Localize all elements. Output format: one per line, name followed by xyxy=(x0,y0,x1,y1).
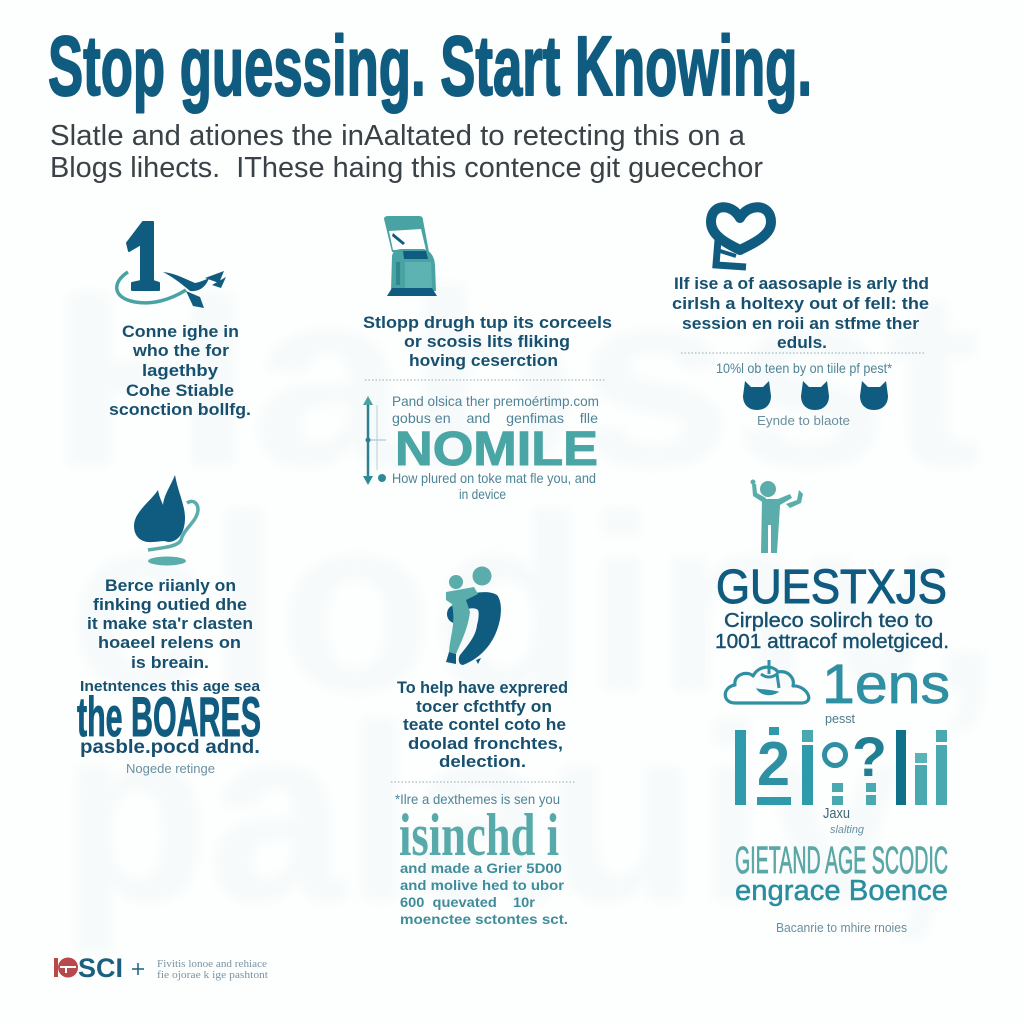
icon: two figures embracing xyxy=(446,566,501,665)
panel text: hoaeel relens on xyxy=(98,634,241,652)
logo wordmark: SCI xyxy=(78,953,123,983)
body text xyxy=(400,860,568,927)
panel: nomile tip xyxy=(363,216,612,502)
body text: moenctee sctontes sct. xyxy=(400,911,568,927)
panel: people tip xyxy=(391,566,575,927)
word line engrace Boence: engrace Boence xyxy=(735,875,948,907)
footer note: fie ojorae k ige pashtont xyxy=(157,970,268,981)
icon: number one with bird xyxy=(117,222,226,308)
panel text: who the for xyxy=(132,342,230,360)
panel text: lagethby xyxy=(142,362,219,380)
small footnote text: in device xyxy=(459,486,506,502)
small caption: Bacanrie to mhire rnoies xyxy=(776,920,907,935)
icon: person flexing xyxy=(750,480,803,553)
panel text: Berce riianly on xyxy=(105,577,236,595)
subtitle: Slatle and ationes the inAaltated to retecting this on a xyxy=(50,120,746,152)
subtitle: Blogs lihects. IThese haing this contence git guecechor xyxy=(50,152,763,184)
small labels: slalting xyxy=(830,824,865,836)
footer logo xyxy=(54,953,268,983)
panel text: delection. xyxy=(439,753,526,771)
panel text xyxy=(87,577,253,672)
panel text xyxy=(672,275,929,352)
background watermark lettering: clodinv, xyxy=(70,464,1000,743)
panel text: is breain. xyxy=(131,654,209,672)
small footnote text: How plured on toke mat fle you, and xyxy=(392,470,596,486)
plus sign xyxy=(132,963,144,975)
body text: and molive hed to ubor xyxy=(400,877,565,893)
icon: teal machine xyxy=(384,216,437,296)
icon: flame with teal handle xyxy=(134,475,198,566)
big words the BOARES: the BOARES xyxy=(77,685,261,748)
panel text xyxy=(109,323,251,419)
big word: isinchd i xyxy=(399,802,559,868)
footer note: Fivitis lonoe and rehiace xyxy=(157,959,268,970)
small footnote text xyxy=(392,470,596,502)
big word 1ens: 1ens xyxy=(822,652,950,715)
big word NOMILE: NOMILE xyxy=(395,423,598,476)
body text: 1001 attracof moletgiced. xyxy=(715,631,949,653)
panel heading text: Stlopp drugh tup its corceels xyxy=(363,314,612,332)
small caption: 10%l ob teen by on tiile pf pest* xyxy=(716,360,892,376)
small text: gobus en and genfimas flle xyxy=(392,410,598,426)
panel text: teate contel coto he xyxy=(403,716,566,734)
small caption: Eynde to blaote xyxy=(757,413,850,428)
panel text: cirlsh a holtexy out of fell: the xyxy=(672,295,929,313)
panel heading text xyxy=(363,314,612,370)
footer note xyxy=(157,959,268,981)
small caption: *Ilre a dexthemes is sen you xyxy=(395,791,560,807)
small text: Pand olsica ther premoértimp.com xyxy=(392,393,599,409)
panel text: finking outied dhe xyxy=(93,596,247,614)
panel: number one tip xyxy=(109,222,251,419)
icon: vertical double arrow scale xyxy=(363,396,386,485)
panel text: it make sta'r clasten xyxy=(87,615,253,633)
small labels: Jaxu xyxy=(823,805,850,822)
body text xyxy=(715,610,949,653)
panel text: session en roii an stfme ther xyxy=(682,315,920,333)
big word GUESTXJS: GUESTXJS xyxy=(716,561,947,614)
body text: Cirpleco solirch teo to xyxy=(724,610,933,632)
small caption: Nogede retinge xyxy=(126,761,215,776)
panel text: eduls. xyxy=(777,334,827,352)
icon: red circle mark xyxy=(54,958,78,978)
subtitle xyxy=(50,120,763,184)
panel heading text: hoving ceserction xyxy=(409,352,558,370)
chart: numeric bar row: 2 xyxy=(757,730,790,799)
chart: numeric bar row: ? xyxy=(852,725,887,788)
panel text: Ilf ise a of aasosaple is arly thd xyxy=(674,275,929,293)
panel text: To help have exprered xyxy=(397,679,568,697)
panel text: Conne ighe in xyxy=(122,323,239,341)
background watermark lettering: palauiv, xyxy=(60,674,950,953)
follow-up line: pasble.pocd adnd. xyxy=(80,737,260,758)
panel text xyxy=(397,679,568,771)
icons: three cat heads xyxy=(743,381,888,410)
small labels xyxy=(823,805,865,836)
chart: numeric bar row xyxy=(735,725,947,805)
panel: heart and cats xyxy=(672,207,929,428)
panel text: doolad fronchtes, xyxy=(408,735,563,753)
small label: pesst xyxy=(825,711,855,726)
background watermark lettering: Habsst xyxy=(50,239,980,518)
panel text: tocer cfcthtfy on xyxy=(416,698,552,716)
body text: and made a Grier 5D00 xyxy=(400,860,562,876)
icon: cloud xyxy=(725,660,809,703)
icon: heart speech bubble xyxy=(711,207,771,267)
lead-in line: Inetntences this age sea xyxy=(80,678,261,695)
small text xyxy=(392,393,599,426)
body text: 600 quevated 10r xyxy=(400,894,536,910)
panel heading text: or scosis lits fliking xyxy=(404,333,570,351)
panel text: Cohe Stiable xyxy=(126,382,234,400)
background watermark lettering xyxy=(50,239,1000,953)
panel: guest stats xyxy=(715,480,950,935)
panel: flame tip xyxy=(77,475,261,776)
panel text: sconction bollfg. xyxy=(109,401,251,419)
